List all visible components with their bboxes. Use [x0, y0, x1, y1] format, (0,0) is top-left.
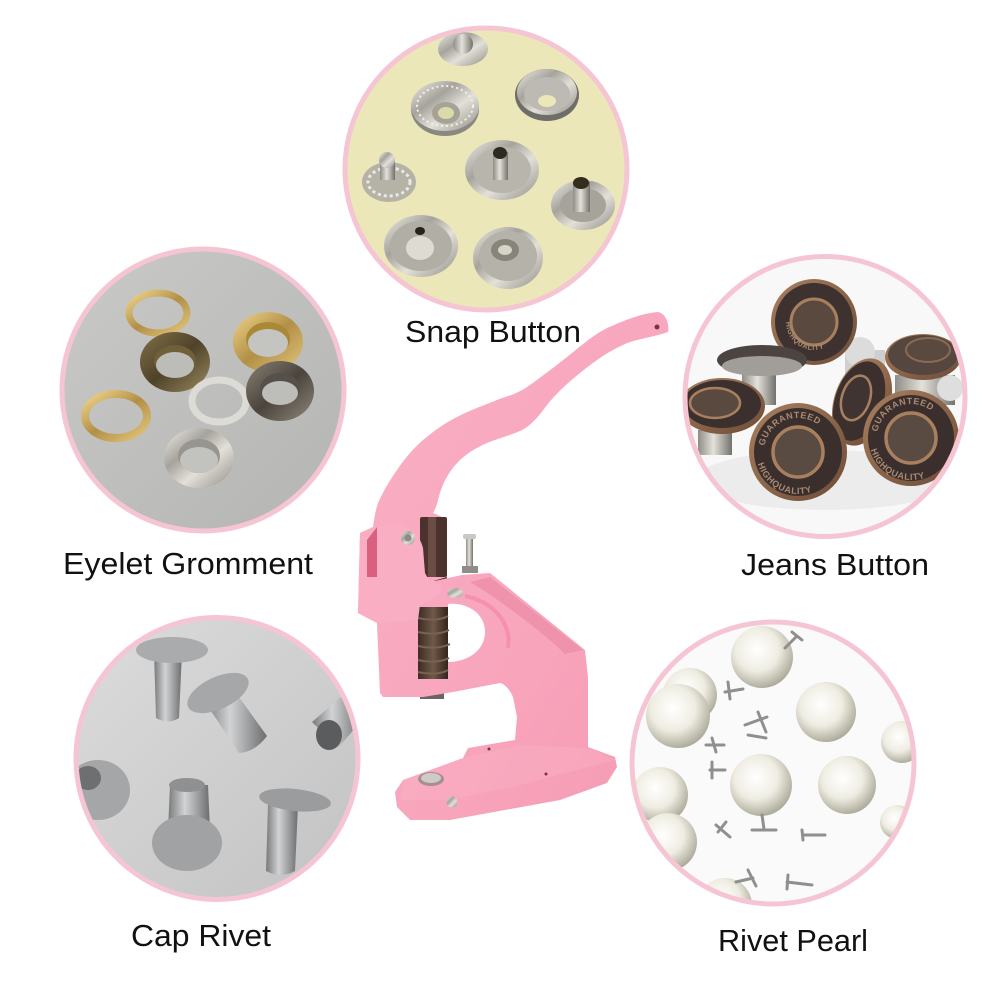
rivet upper left: [136, 637, 208, 722]
jeans button front: GUARANTEED: [759, 412, 820, 445]
rivet lower right: [258, 785, 332, 875]
heading: Eyelet Gromment: Eyelet Gromment: [63, 546, 313, 581]
eyelet flat gold ring: [85, 394, 147, 438]
eyelet thin brass ring: [129, 293, 187, 333]
jeans button front right: HIGHQUALITY: [870, 448, 923, 480]
panel: rivet pearl: [636, 626, 912, 900]
jeans button left: [679, 378, 765, 434]
snap knob with flower base: [362, 152, 416, 202]
eyelet bronze: [140, 332, 210, 392]
eyelet silver: [164, 428, 234, 488]
press triangular recess: [470, 577, 583, 654]
rivet lower left: [78, 760, 130, 820]
heading: Snap Button: Snap Button: [405, 314, 581, 349]
rivet right: [312, 697, 353, 750]
snap ring with teeth: [411, 81, 479, 136]
jeans button front right: [863, 390, 958, 486]
press body: [358, 312, 668, 820]
jeans back-side silver stems: [698, 337, 963, 455]
press throat rim: [465, 596, 509, 648]
rivet middle: [187, 672, 267, 753]
snap socket cap: [515, 69, 579, 121]
press arm bracket: [358, 524, 442, 623]
jeans button front right: GUARANTEED: [872, 398, 934, 431]
eyelet gunmetal: [246, 361, 314, 421]
press throat opening: [448, 604, 485, 662]
snap bottom right: [473, 227, 543, 289]
pearl border: [632, 622, 914, 904]
press dark punch back: [420, 517, 447, 581]
jeans button top: HIGHQUALITY: [786, 322, 822, 350]
jeans button side: [717, 345, 807, 376]
snap bottom left: [384, 215, 458, 277]
press spring front: [418, 607, 450, 679]
press base highlight: [400, 745, 616, 800]
heading: Jeans Button: Jeans Button: [741, 547, 929, 582]
eyelet thin silver ring: [192, 380, 246, 422]
press small pin: [462, 534, 478, 573]
press side screw: [447, 588, 463, 598]
panel: cap rivet: [66, 616, 362, 904]
press bracket slot: [367, 527, 377, 577]
panel: eyelet grommet: [60, 248, 346, 534]
small rivets: [706, 632, 825, 889]
jeans border: [685, 256, 965, 536]
panel: jeans button: [688, 279, 962, 510]
press machine: [358, 312, 668, 820]
snap stud top: [438, 32, 488, 66]
snap right post: [551, 177, 615, 230]
press base anvil: [418, 772, 444, 786]
jeans button front: HIGHQUALITY: [758, 462, 810, 494]
press punch front: [420, 517, 447, 577]
heading: Cap Rivet: Cap Rivet: [131, 918, 271, 953]
pearls: [636, 626, 912, 900]
jeans button right: [885, 334, 961, 380]
press base holes: [488, 748, 548, 776]
jeans button top: [771, 279, 857, 365]
jeans button front: [749, 403, 847, 501]
press spring stem back: [418, 607, 448, 699]
press pivot screw: [401, 531, 415, 545]
eyelet border: [62, 249, 344, 531]
snap centre post: [465, 140, 539, 200]
heading: Rivet Pearl: Rivet Pearl: [718, 923, 868, 958]
eyelet gold: [233, 312, 303, 372]
panel: snap button: [348, 30, 624, 308]
cap rivet border: [76, 618, 358, 900]
rivet standing cap down: [152, 778, 222, 871]
shadow under buttons: [708, 450, 934, 510]
snap button border: [345, 28, 627, 310]
press handle hole: [654, 324, 660, 330]
press base screw: [446, 796, 458, 808]
jeans button middle: [832, 358, 892, 446]
